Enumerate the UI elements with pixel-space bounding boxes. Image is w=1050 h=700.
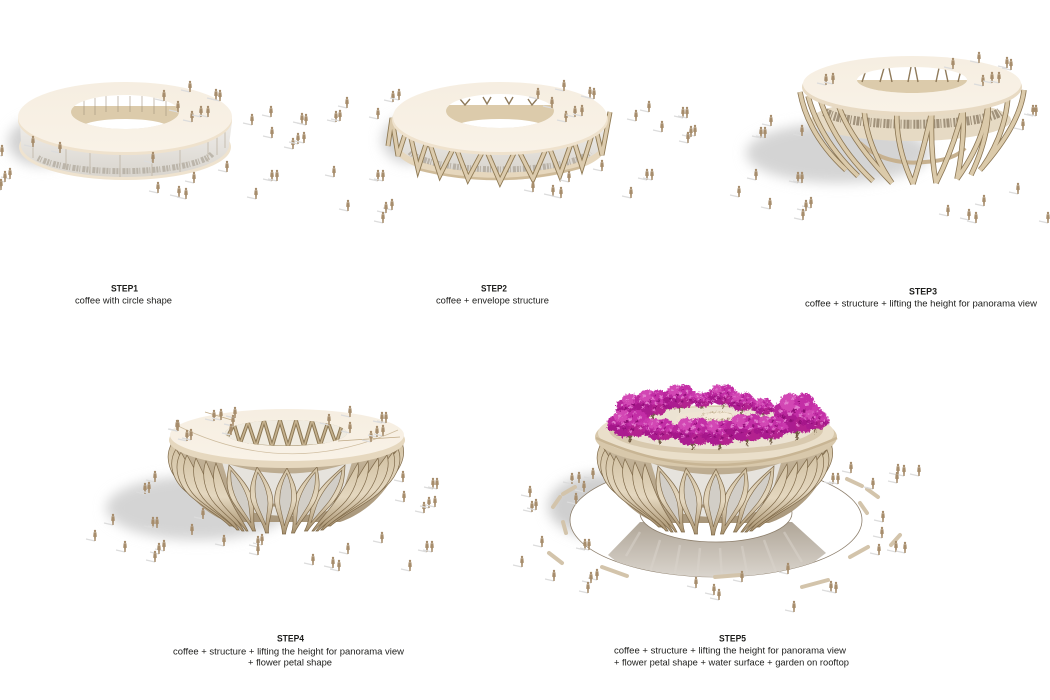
water surface with reflection xyxy=(570,480,862,578)
people xyxy=(513,462,921,612)
caption: step 3 xyxy=(805,286,1037,310)
caption: step 4: + flower petal shape xyxy=(248,658,332,668)
caption: step 1 xyxy=(75,284,172,306)
panel: step 5 xyxy=(513,385,921,668)
building: flower petal bowl xyxy=(168,409,405,534)
panel: step 4 xyxy=(86,406,439,668)
ground shadow xyxy=(8,118,76,166)
building: flower petal bowl xyxy=(578,405,854,535)
caption: step 2: STEP2 xyxy=(481,284,507,294)
benches xyxy=(549,479,900,587)
people xyxy=(0,81,350,211)
people xyxy=(730,52,1050,223)
ground shadow xyxy=(382,116,442,164)
panel: step 2 xyxy=(369,80,697,306)
caption: step 4 xyxy=(173,634,404,668)
ground shadow xyxy=(106,476,290,540)
caption: step 5: coffee + structure + lifting the height for panorama view xyxy=(614,646,846,656)
panel: step 3 xyxy=(730,52,1050,310)
people xyxy=(86,406,439,571)
rooftop pavilion xyxy=(701,412,733,425)
building: circular coffee ring xyxy=(18,82,232,180)
caption: step 5: + flower petal shape + water surface + garden on rooftop xyxy=(614,658,849,668)
panel: step 1 xyxy=(0,81,350,306)
building: ring with envelope structure xyxy=(388,82,610,182)
caption: step 3: coffee + structure + lifting the height for panorama view xyxy=(805,298,1037,310)
ground shadow xyxy=(746,123,930,183)
caption: step 4: coffee + structure + lifting the height for panorama view xyxy=(173,646,404,658)
ground shadow xyxy=(548,474,656,538)
caption: step 5 xyxy=(614,634,849,668)
caption: step 4: STEP4 xyxy=(277,634,305,644)
people xyxy=(369,80,697,223)
envelope zigzag struts xyxy=(388,112,610,182)
rooftop garden: pink trees xyxy=(607,385,829,450)
caption: step 1: STEP1 xyxy=(111,284,139,294)
caption: step 5: STEP5 xyxy=(719,634,747,644)
caption: step 1: coffee with circle shape xyxy=(75,296,172,306)
caption: step 3: STEP3 xyxy=(909,286,937,298)
caption: step 2 xyxy=(436,284,549,306)
building: lifted ring on columns xyxy=(800,56,1024,184)
caption: step 2: coffee + envelope structure xyxy=(436,296,549,306)
